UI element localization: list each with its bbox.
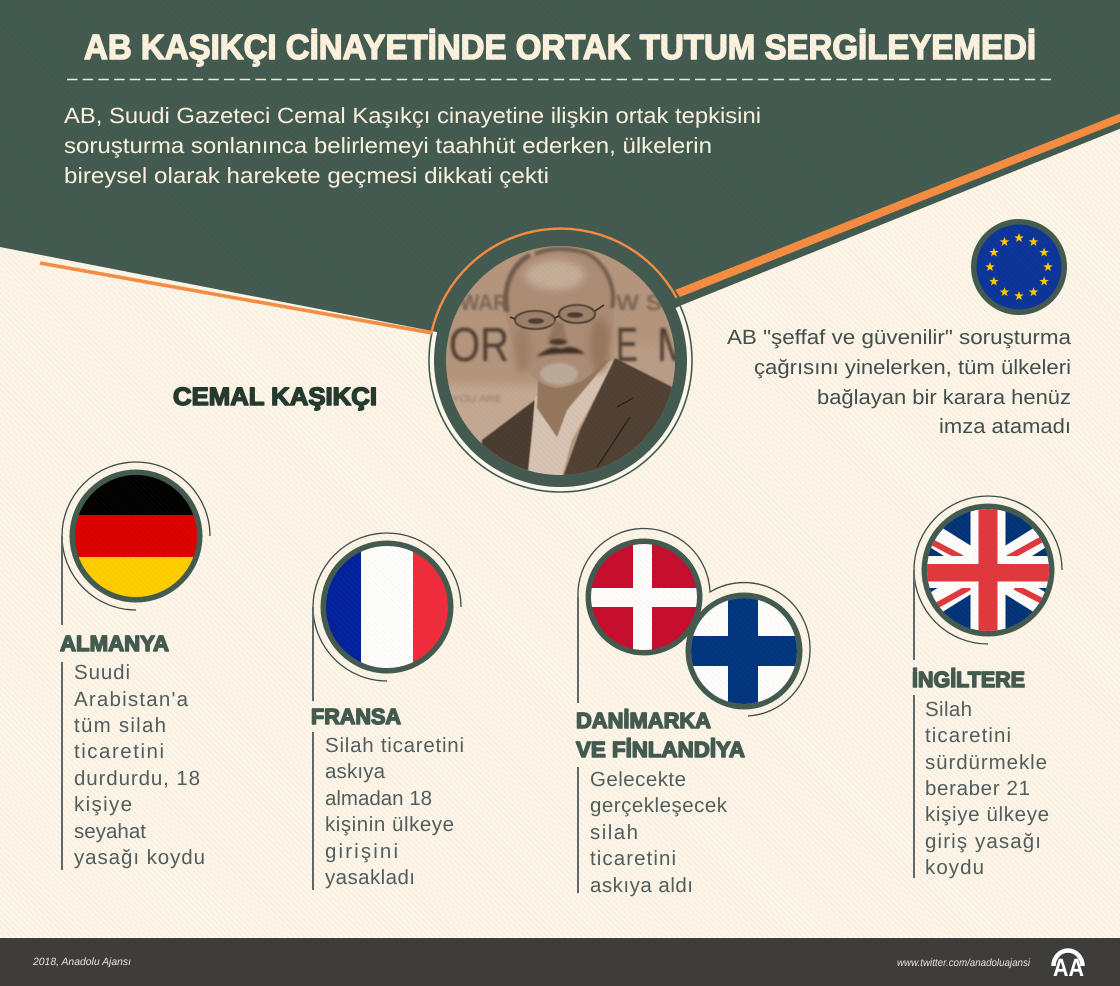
heading: İngiltere: İNGİLTERE	[912, 667, 1025, 692]
EU text: imza atamadı	[939, 415, 1071, 438]
intro text: bireysel olarak harekete geçmesi dikkati çekti	[64, 163, 549, 188]
heading: Almanya: ALMANYA	[60, 631, 169, 656]
dark green header panel	[0, 0, 1120, 361]
EU text: çağrısını yinelerken, tüm ülkeleri	[754, 356, 1071, 379]
intro text: AB, Suudi Gazeteci Cemal Kaşıkçı cinayetine ilişkin ortak tepkisini	[64, 103, 761, 128]
text: Danimarka ve Finlandiya: gerçekleşecek	[590, 794, 728, 817]
text: Almanya: Suudi	[74, 661, 130, 684]
flags: Denmark and Finland	[578, 528, 810, 716]
text: İngiltere: koydu	[925, 856, 984, 879]
panel: Danimarka ve Finlandiya	[576, 528, 810, 897]
text: Fransa	[313, 732, 464, 890]
text: Almanya: kişiye	[74, 793, 132, 816]
flag: UK	[908, 496, 1068, 660]
text: Fransa: almadan 18	[325, 787, 432, 810]
portrait outer ring	[429, 229, 692, 492]
text: Danimarka ve Finlandiya: Gelecekte	[590, 768, 686, 791]
portrait photo: M	[657, 319, 691, 372]
footer url: www.twitter.com/anadoluajansi	[897, 957, 1031, 969]
heading: Danimarka ve Finlandiya	[576, 708, 745, 762]
footer credit: 2018, Anadolu Ajansı	[32, 956, 131, 968]
text: Almanya: durdurdu, 18	[74, 767, 200, 790]
text: İngiltere	[914, 695, 1049, 879]
portrait disc	[434, 234, 687, 487]
text: Fransa: yasakladı	[325, 866, 415, 889]
portrait photo: W S	[616, 290, 662, 315]
text: Fransa: Silah ticaretini	[325, 734, 464, 757]
text: Fransa: askıya	[325, 760, 386, 783]
EU text: bağlayan bir karara henüz	[817, 386, 1071, 409]
heading: Danimarka ve Finlandiya: VE FİNLANDİYA	[576, 737, 745, 762]
text: İngiltere: sürdürmekle	[925, 751, 1047, 774]
text: Almanya: Arabistan'a	[74, 688, 189, 711]
panel: Almanya	[60, 462, 210, 870]
flag: France	[313, 533, 461, 701]
portrait photo: E	[616, 319, 638, 372]
text: Danimarka ve Finlandiya: silah	[590, 821, 638, 844]
intro text	[64, 103, 761, 188]
EU text	[727, 326, 1072, 438]
EU text: AB "şeffaf ve güvenilir" soruşturma	[727, 326, 1072, 349]
title: AB KAŞIKÇI CİNAYETİNDE ORTAK TUTUM SERGİLEYEMEDİ	[84, 28, 1036, 67]
panel: İngiltere	[908, 496, 1068, 879]
dashed divider	[67, 78, 1055, 80]
portrait photo	[446, 246, 675, 475]
text: İngiltere: beraber 21	[925, 777, 1030, 800]
panel: Fransa	[311, 533, 464, 890]
heading: Fransa: FRANSA	[311, 704, 401, 729]
footer bar	[0, 938, 1120, 986]
text: İngiltere: Silah	[925, 698, 972, 721]
heading: Danimarka ve Finlandiya: DANİMARKA	[576, 708, 711, 733]
text: İngiltere: giriş yasağı	[925, 830, 1041, 853]
text: Fransa: girişini	[325, 840, 398, 863]
portrait photo: WAR	[460, 290, 508, 315]
portrait photo: OR	[449, 319, 509, 372]
icon: EU flag	[971, 219, 1067, 315]
flag: Germany	[62, 462, 210, 625]
intro text: soruşturma sonlanınca belirlemeyi taahhüt ederken, ülkelerin	[64, 133, 712, 158]
text: İngiltere: ticaretini	[925, 724, 1011, 747]
text: Almanya: seyahat	[74, 820, 146, 843]
text: Almanya: yasağı koydu	[74, 846, 205, 869]
orange arc around portrait	[431, 229, 677, 333]
portrait photo: YOU ARE	[452, 394, 502, 405]
name label: CEMAL KAŞIKÇI	[173, 383, 377, 411]
text: Danimarka ve Finlandiya	[578, 767, 728, 897]
orange diagonal band	[675, 114, 1120, 297]
orange line left	[40, 263, 432, 333]
text: İngiltere: kişiye ülkeye	[925, 803, 1049, 826]
text: Danimarka ve Finlandiya: ticaretini	[590, 847, 676, 870]
text: Almanya	[62, 661, 205, 870]
text: Fransa: kişinin ülkeye	[325, 813, 454, 836]
icon: AA logo: AA	[1053, 954, 1084, 982]
text: Danimarka ve Finlandiya: askıya aldı	[590, 874, 693, 897]
text: Almanya: ticaretini	[74, 740, 164, 763]
text: Almanya: tüm silah	[74, 714, 166, 737]
